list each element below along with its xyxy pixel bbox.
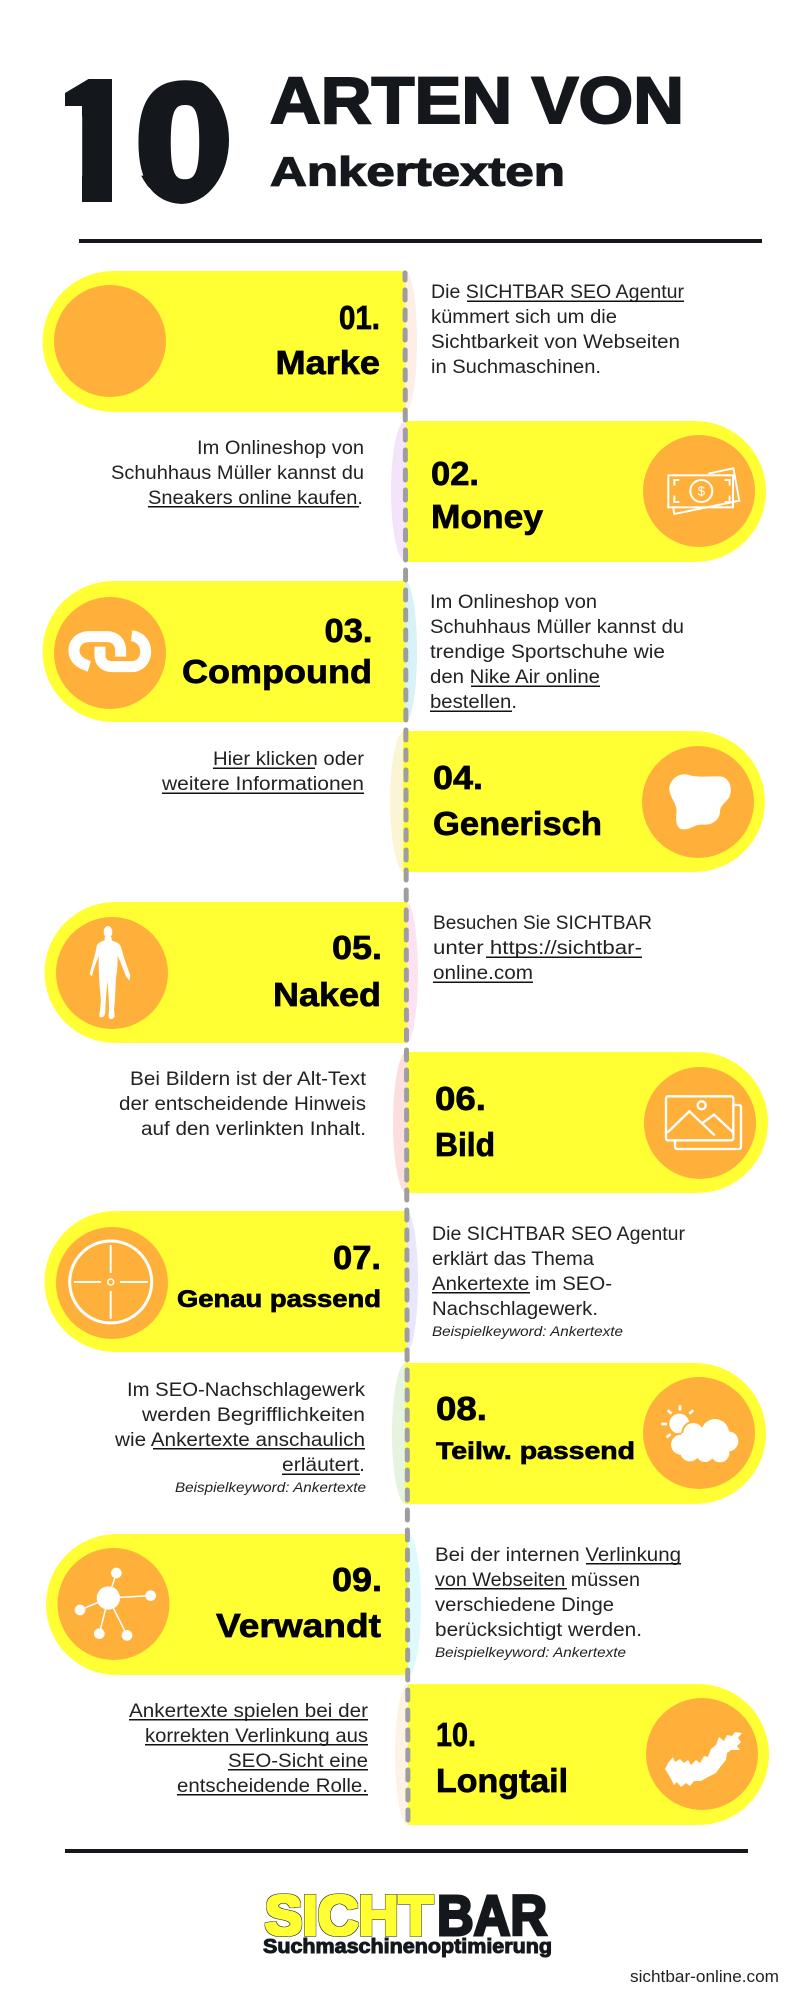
heading line: Ankertexten: Ankertexten <box>270 148 565 194</box>
number: 03. <box>324 612 372 649</box>
step 03 Compound <box>42 580 417 722</box>
number: 02. <box>431 455 479 492</box>
step 01 Marke <box>43 270 417 412</box>
icon circle <box>646 1698 758 1810</box>
text block 02 <box>111 438 364 509</box>
label: Teilw. passend <box>436 1438 635 1465</box>
pill <box>405 1363 766 1504</box>
number: 10. <box>436 1716 476 1753</box>
step 06 Bild <box>393 1052 768 1194</box>
logo word: BAR: BAR <box>437 1884 547 1948</box>
text block 01 <box>431 282 685 378</box>
number: 06. <box>435 1080 486 1117</box>
step 09 Verwandt <box>46 1534 421 1676</box>
big number 10 <box>65 79 229 204</box>
pastel backdrop <box>390 730 420 872</box>
pill <box>44 1211 407 1352</box>
text block 10: Ankertexte spielen bei der <box>129 1701 369 1722</box>
icon circle <box>56 917 168 1029</box>
website url: sichtbar-online.com <box>630 1967 779 1986</box>
label: Longtail <box>436 1762 568 1799</box>
title <box>65 76 680 204</box>
text block 04: Hier klicken oder <box>213 749 365 770</box>
pastel backdrop <box>395 1684 421 1826</box>
text block 05: unter https://sichtbar- <box>433 938 642 959</box>
step 04 Generisch <box>390 730 765 872</box>
icon: empty orange circle <box>54 285 166 397</box>
number: 08. <box>436 1390 487 1427</box>
label: Naked <box>273 976 381 1013</box>
text block 03: Im Onlineshop von <box>430 592 597 613</box>
pill <box>403 731 765 872</box>
text block 09: berücksichtigt werden. <box>435 1620 642 1641</box>
text block 06: Bei Bildern ist der Alt-Text <box>130 1069 367 1090</box>
label: Generisch <box>433 805 602 842</box>
text block 01: in Suchmaschinen. <box>431 357 601 378</box>
text block 05 <box>433 913 652 984</box>
icon: fluffy tail <box>665 1732 742 1787</box>
big number 10: 1 <box>47 50 147 234</box>
icon: human figure <box>90 926 130 1019</box>
text block 10: korrekten Verlinkung aus <box>145 1726 368 1747</box>
text block 03: trendige Sportschuhe wie <box>430 642 665 663</box>
text block 07: Nachschlagewerk. <box>432 1299 598 1320</box>
text block 09: von Webseiten müssen <box>435 1570 640 1591</box>
text block 02: Im Onlineshop von <box>197 438 364 459</box>
step 02 Money <box>391 420 766 562</box>
big number 10: 0 <box>135 50 235 234</box>
icon circle <box>643 435 755 547</box>
text block 05: online.com <box>433 963 533 984</box>
pastel backdrop <box>392 1362 420 1504</box>
label: Marke <box>276 344 380 381</box>
dashed timeline <box>405 273 408 1825</box>
text block 08: werden Begrifflichkeiten <box>141 1405 365 1426</box>
number: 05. <box>332 929 382 966</box>
text block 03 <box>430 592 684 713</box>
label: Money <box>431 498 544 535</box>
step 05 Naked <box>44 902 418 1044</box>
logo word: SICHT: SICHT <box>265 1884 433 1946</box>
label: Bild <box>435 1126 495 1163</box>
text block 09: verschiedene Dinge <box>435 1595 614 1616</box>
pastel backdrop <box>391 420 421 562</box>
text block 06: der entscheidende Hinweis <box>119 1094 366 1115</box>
pastel backdrop <box>393 580 417 722</box>
pill <box>44 902 407 1043</box>
label: Genau passend <box>177 1286 381 1313</box>
icon circle <box>54 597 166 709</box>
logo tagline: Suchmaschinenoptimierung <box>263 1936 552 1958</box>
icon: banknotes <box>668 468 739 514</box>
icon circle <box>643 1377 755 1489</box>
icon circle <box>644 1067 756 1179</box>
text block 08: Beispielkeyword: Ankertexte <box>175 1479 366 1495</box>
step 07 Genau passend <box>44 1210 418 1352</box>
logo <box>263 1884 552 1958</box>
pastel backdrop <box>393 1052 421 1194</box>
icon: pictures <box>666 1096 741 1149</box>
icon: blob <box>669 774 731 829</box>
pill <box>46 1534 408 1675</box>
icon: chain link <box>74 636 146 667</box>
text block 07: Die SICHTBAR SEO Agentur <box>432 1224 686 1245</box>
step 10 Longtail <box>395 1684 769 1826</box>
icon: crosshair <box>70 1241 152 1323</box>
text block 01: Sichtbarkeit von Webseiten <box>431 332 680 353</box>
pill <box>42 581 405 722</box>
icon: banknotes: $ <box>698 484 706 499</box>
text block 06 <box>119 1069 367 1140</box>
text block 01: kümmert sich um die <box>431 307 617 328</box>
pill <box>43 271 405 412</box>
pill <box>407 1052 768 1193</box>
text block 03: bestellen. <box>430 692 517 713</box>
text block 08: erläutert. <box>282 1455 365 1476</box>
pill <box>406 421 766 562</box>
number: 01. <box>339 299 380 336</box>
text block 09: Bei der internen Verlinkung <box>435 1545 681 1566</box>
text block 07 <box>432 1224 686 1339</box>
icon circle <box>642 746 754 858</box>
text block 04: weitere Informationen <box>161 774 364 795</box>
pastel backdrop <box>394 902 418 1044</box>
text block 08 <box>114 1380 366 1495</box>
label: Compound <box>182 653 372 690</box>
pastel backdrop <box>393 270 417 412</box>
pill <box>408 1684 769 1825</box>
text block 10: entscheidende Rolle. <box>177 1776 368 1797</box>
heading line: ARTEN VON: ARTEN VON <box>270 63 684 137</box>
text block 09 <box>435 1545 681 1660</box>
text block 01: Die SICHTBAR SEO Agentur <box>431 282 685 303</box>
pastel backdrop <box>395 1534 421 1676</box>
text block 04 <box>161 749 365 795</box>
icon circle <box>56 1227 168 1339</box>
text block 03: den Nike Air online <box>430 667 600 688</box>
label: Verwandt <box>216 1607 381 1644</box>
text block 05: Besuchen Sie SICHTBAR <box>433 913 652 934</box>
text block 09: Beispielkeyword: Ankertexte <box>435 1644 626 1660</box>
text block 03: Schuhhaus Müller kannst du <box>430 617 684 638</box>
text block 02: Schuhhaus Müller kannst du <box>111 463 364 484</box>
step 08 Teilw. passend <box>392 1362 766 1504</box>
text block 07: Ankertexte im SEO- <box>432 1274 612 1295</box>
text block 08: Im SEO-Nachschlagewerk <box>127 1380 366 1401</box>
text block 10: SEO-Sicht eine <box>228 1751 368 1772</box>
number: 04. <box>433 759 483 796</box>
pastel backdrop <box>394 1210 418 1352</box>
icon: sun and cloud <box>661 1405 738 1462</box>
text block 06: auf den verlinkten Inhalt. <box>141 1119 366 1140</box>
number: 07. <box>333 1239 381 1276</box>
icon circle <box>58 1548 170 1660</box>
text block 10 <box>129 1701 369 1797</box>
icon: network nodes <box>75 1568 156 1641</box>
text block 08: wie Ankertexte anschaulich <box>114 1430 365 1451</box>
text block 07: erklärt das Thema <box>432 1249 594 1270</box>
text block 07: Beispielkeyword: Ankertexte <box>432 1323 623 1339</box>
number: 09. <box>332 1561 382 1598</box>
text block 02: Sneakers online kaufen. <box>148 488 363 509</box>
